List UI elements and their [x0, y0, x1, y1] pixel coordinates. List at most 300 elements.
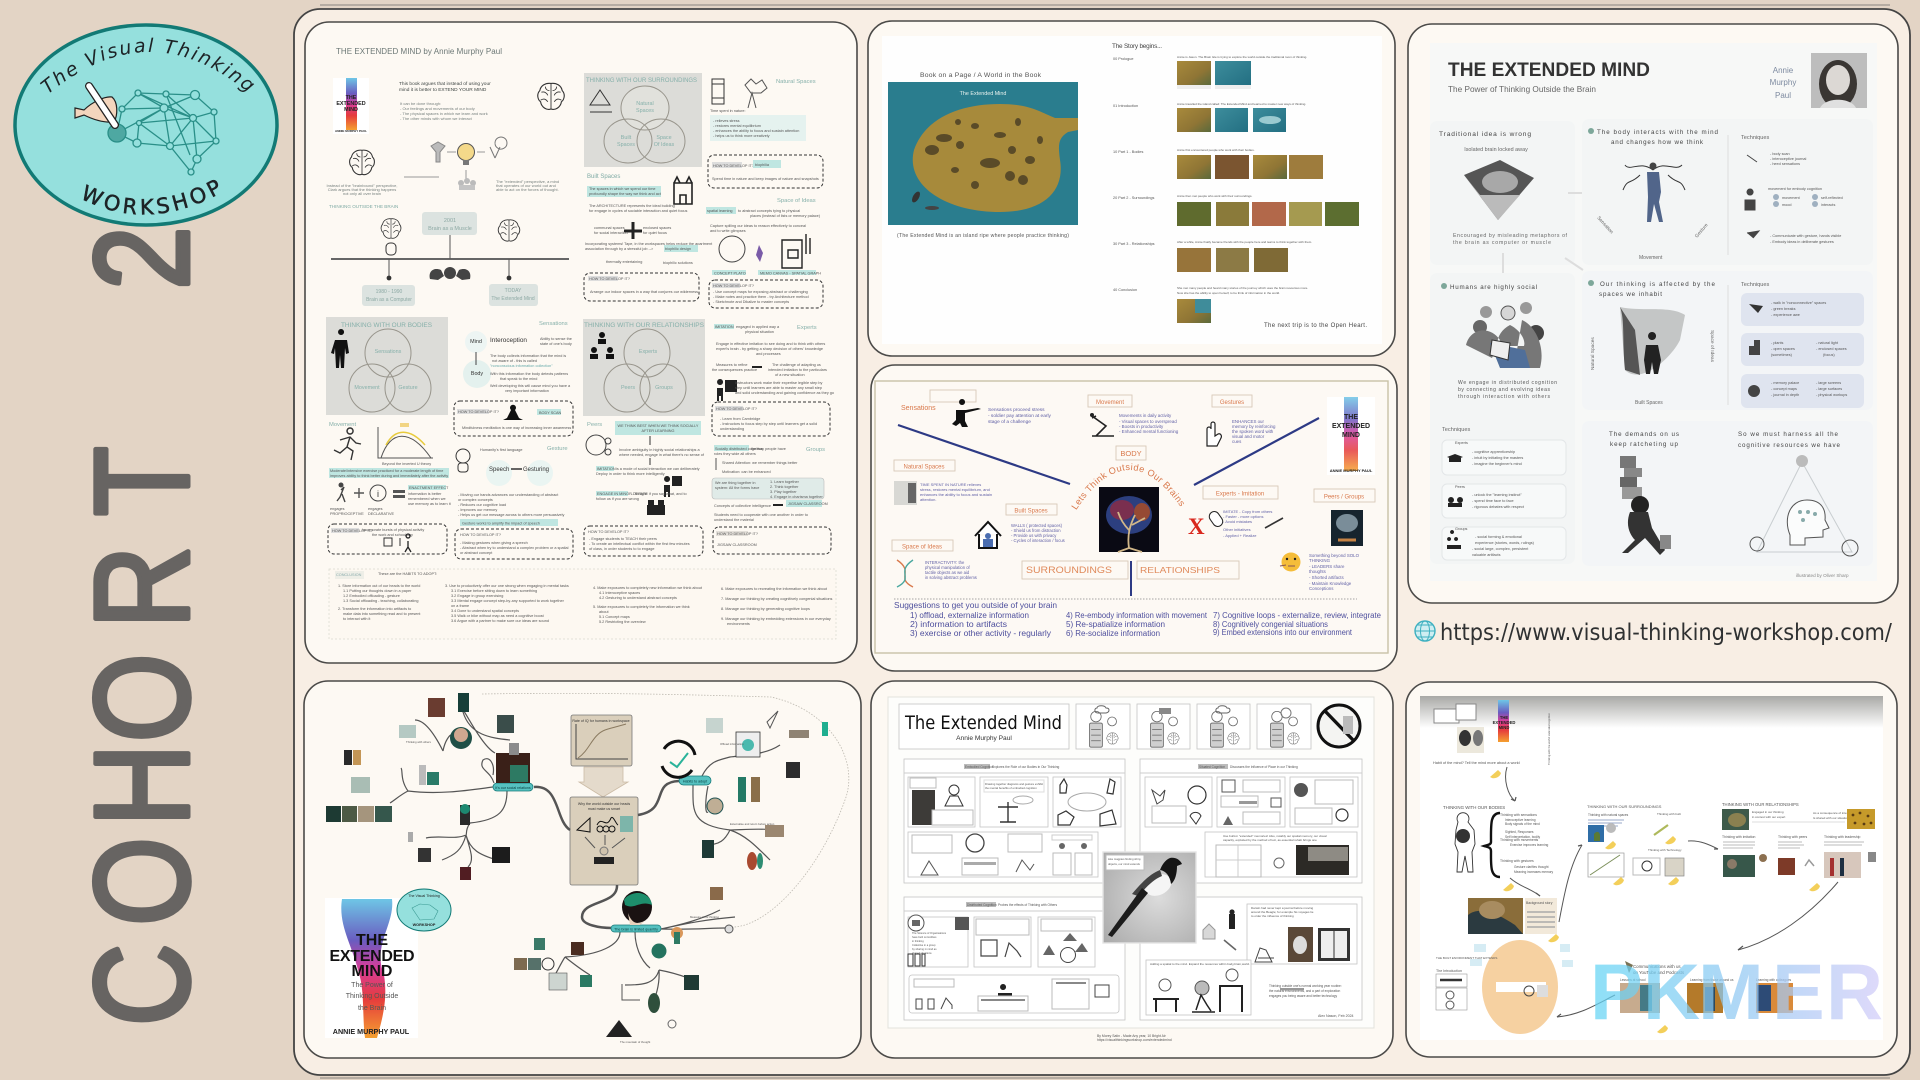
section: thinking with others bottom: Learning from those around us [1690, 978, 1734, 982]
dashed box: how to Surroundings [584, 273, 699, 301]
movement explanatory notes [329, 468, 452, 516]
peers groups item: - LEADERS share [1309, 564, 1345, 569]
card: body interacts: - Communicate with gesture, hands visible [1770, 234, 1841, 238]
card: humans social [1430, 273, 1575, 564]
experts item: X [1188, 514, 1205, 539]
built spaces notes: for social interaction [594, 231, 628, 235]
dashed box: how to natural spaces: HOW TO DEVELOP IT? [713, 164, 754, 168]
built spaces notes: Incorporating systems! Tape, in the workspaces helps reduce the apartment [585, 242, 713, 246]
gestures item [1207, 395, 1276, 446]
mind map thumbnails [326, 693, 828, 1037]
technique: ideas: - physical workups [1816, 393, 1847, 397]
card: spaces: Our thinking is affected by the [1600, 281, 1716, 288]
experts item: - Applied + Realize [1223, 533, 1257, 538]
movement explanatory notes: i [377, 489, 379, 499]
conclusion box: 3.1 Exercise before sitting down to learn something [451, 589, 537, 593]
extended perspective text: able to act on the forces of thought. [496, 187, 559, 192]
book cover large [325, 898, 418, 1038]
venn panel: relationships: Experts [639, 349, 657, 355]
section: distributed cognition: shared situations [912, 951, 932, 955]
venn panel: bodies: Movement [354, 385, 380, 391]
dashed box: gesture how [455, 529, 573, 559]
movement item: - Boosts in productivity [1119, 424, 1164, 429]
conclusion box: to interact with it [343, 617, 371, 621]
dotted separator [894, 598, 1357, 600]
story row: introduction: Annie travelled the island called: The Extended Mind and learned to master new ways of thinking. [1177, 102, 1306, 106]
author name: Paul [1775, 91, 1791, 100]
pill nodes [493, 776, 711, 932]
author photo [1811, 53, 1867, 108]
conclusion box: 4. Make exposures to completely new information we think about [593, 586, 703, 590]
timeline box: 2001 [422, 212, 477, 235]
section: thinking with others bottom [1620, 961, 1793, 1013]
conclusion box: 8. Manage our thinking by generating cognitive loops [721, 607, 810, 611]
dashed box: experts how: - Instructors to focus step by step until learners get a solid [720, 422, 817, 426]
natural spaces item: enhances the ability to focus and sustain [920, 492, 992, 497]
dashed box: gesture how: - Making gestures when giving a speech [460, 541, 528, 545]
gesture notes: - Reduces our cognitive load [458, 503, 506, 507]
mini book cover: EXTENDED [1332, 423, 1370, 430]
story row: part 3: 30 Part 3 - Relationships [1113, 242, 1155, 246]
technique: ideas: - large screens [1816, 381, 1841, 385]
section: bodies: THINKING WITH OUR BODIES [1443, 805, 1505, 810]
venn panel: relationships [583, 319, 705, 416]
card: body interacts: - Embody ideas in deliberate gestures [1770, 240, 1834, 244]
story row: part 1: 10 Part 1 - Bodies [1113, 150, 1143, 154]
gesture notes: Gesture works to amplify the impact of speech [462, 522, 540, 526]
surroundings label [1022, 561, 1128, 579]
section: bodies: Sighted, Responses [1505, 830, 1534, 834]
built spaces item [975, 504, 1065, 548]
groups notes: 3. Play together [770, 490, 797, 494]
small mind map labels: The mountain of thought [620, 1040, 651, 1044]
timeline box: today: The Extended Mind [491, 296, 535, 302]
groups notes: roles they wide all others [714, 452, 756, 456]
illustration: loaded figure [1620, 456, 1671, 555]
icon: cycle check [662, 741, 695, 777]
sensations item: - soldier pay attention at early [988, 413, 1052, 419]
central brain image [1099, 487, 1159, 552]
movement item: - Enhanced mental functioning [1119, 429, 1179, 434]
section: situated cognition: Use built-in "extended" memories! Also, notably our spatial memory, our visual [1223, 834, 1327, 838]
card: demands and resources [1582, 421, 1873, 566]
card: demands and resources: So we must harness all the [1738, 431, 1839, 438]
book cover thumbnail: ANNIE MURPHY PAUL [335, 129, 367, 133]
conclusion box: 7. Manage our thinking by creating cognitively congenial situations [721, 597, 833, 601]
small mind map labels: Externalise and return before action [730, 822, 775, 826]
technique: ideas [1741, 374, 1864, 408]
dashed box: peers how: HOW TO DEVELOP IT? [588, 530, 629, 534]
section: conclusion face: THE BUILT ENVIRONMENT THAT EXTENDS [1436, 956, 1497, 960]
book cover thumbnail: MIND [344, 107, 358, 113]
section: bodies: Self interpretation, bodily [1505, 835, 1540, 839]
section: thinking with others bottom: Communications with us [1633, 964, 1681, 969]
section: distributed cognition: Distributed Cognition [967, 903, 997, 907]
built spaces notes: biophilic design [665, 247, 691, 251]
section: surroundings: THINKING WITH OUR SURROUNDINGS [1587, 804, 1662, 809]
story row: part 3: After a while, Annie finally became friends with the people here and learns to think together with them. [1177, 240, 1312, 244]
dashed box: gesture how: or abstract concept [460, 551, 493, 555]
suggestions: 4) Re-embody information with movement [1066, 611, 1208, 620]
intro text: - The other minds with whom we interact [400, 116, 473, 121]
card: traditional idea [1430, 121, 1590, 274]
sheet title box: Annie Murphy Paul [956, 735, 1012, 742]
groups notes: the way people have [751, 447, 786, 451]
card: body interacts: - body scan [1770, 152, 1790, 156]
movement explanatory notes: PROPRIOCEPTIVE [330, 512, 364, 516]
groups notes: understand the material [714, 518, 754, 522]
card: spaces: Space of Ideas [1709, 330, 1715, 363]
card: body interacts: movement [1782, 196, 1801, 200]
magpie image: Like magpies finding shiny [1108, 857, 1141, 861]
card: humans social: by connecting and evolving ideas [1458, 387, 1550, 393]
gestures item: memory by reinforcing [1232, 424, 1276, 429]
pill nodes: Habits to adopt [683, 780, 707, 784]
dashed box: peers how [584, 526, 703, 556]
natural spaces item: stress, restores mental equilibrium, and [920, 487, 990, 492]
conclusion box: 3. Use to productively offer our one strong when engaging in mental tasks [445, 584, 569, 588]
gesture notes: or complex concepts [458, 498, 493, 502]
dashed box: how to ideas: - Make notes and practice them - try Architecture method [713, 295, 809, 299]
story row: introduction: 01 Introduction [1113, 104, 1138, 108]
experts notes: physical situation [745, 330, 774, 334]
small workshop badge [397, 889, 451, 931]
sensations notes: "nonconscious information collection" [490, 364, 553, 368]
built spaces item: Built Spaces [1014, 508, 1048, 514]
section: bodies: Meaning increases memory [1514, 870, 1554, 874]
dashed box: how to natural spaces [708, 155, 823, 188]
experts item: IMITATE - Copy from others [1223, 509, 1272, 514]
technique: peers: - rigorous debates with respect [1472, 505, 1525, 509]
story heading: The Story begins... [1112, 43, 1162, 50]
suggestions: 5) Re-spatialize information [1066, 620, 1165, 629]
space of ideas item: tactile objects as we aid [925, 570, 970, 575]
gesture notes: - Moving our hands advances our understanding of abstract [458, 493, 559, 497]
canvas intro: MIND [1499, 725, 1509, 730]
timeline [331, 212, 569, 306]
book cover large: The Power of [351, 982, 393, 989]
dashed box: experts how: HOW TO DEVELOP IT? [716, 407, 757, 411]
section: bodies: Thinking with sensations [1500, 813, 1537, 817]
story row: prologue: Annie is Jason. The Brain Isle is trying to explore the world outside the traditional room of thinking. [1177, 55, 1307, 59]
small workshop badge: The Visual Thinking [408, 894, 440, 898]
venn panel: relationships: THINKING WITH OUR RELATIONSHIPS [584, 323, 704, 329]
conclusion box: 1.2 Embodied offloading - gesture [343, 594, 400, 598]
built spaces notes: thermally entertaining [606, 260, 642, 264]
built spaces notes: profoundly shape the way we think and act [589, 192, 662, 196]
conclusion box: on a frame [451, 604, 469, 608]
sensations notes: very important information [505, 389, 549, 393]
venn panel: surroundings: Built [621, 135, 632, 141]
natural spaces item: attention. [920, 497, 936, 502]
suggestions: 9) Embed extensions into our environment [1213, 628, 1353, 637]
suggestions: 3) exercise or other activity - regularly [910, 629, 1051, 638]
card: humans social: Techniques [1442, 427, 1471, 433]
intro text [399, 81, 491, 121]
section: spatial notes right: Adding a spatial to the mind. Expand the resources within body,brain,world. [1150, 962, 1250, 966]
section: bodies: Body signals of the mind [1505, 822, 1540, 826]
conclusion box: make data into something read and to present [343, 612, 421, 616]
technique: peers: Peers [1455, 485, 1465, 489]
sensations notes: With this information the body detects patterns [490, 372, 568, 376]
conclusion box: 4.2 Gesturing to understand abstract concepts [599, 596, 677, 600]
space of ideas item [892, 540, 977, 587]
technique: groups: - social large, complex, persistent [1472, 547, 1529, 551]
experts notes: intended imitation to the particulars [768, 368, 827, 372]
venn panel: surroundings: Of Ideas [654, 142, 674, 148]
section: spatial notes right: engages you being aware and better technology [1269, 994, 1337, 998]
groups notes: 2. Think together [770, 485, 799, 489]
author name [1770, 66, 1796, 100]
story row: conclusion [1113, 286, 1308, 323]
natural spaces column [710, 79, 816, 141]
peers notes [586, 421, 705, 515]
space of ideas column [706, 198, 821, 276]
card: demands and resources: keep ratcheting up [1610, 441, 1679, 448]
sensations notes: Mind [470, 339, 482, 345]
section: thinking with others bottom: on YouTube and Podcasts [1633, 970, 1685, 975]
logo text top: The Visual Thinking [40, 38, 254, 92]
sensations notes: Body [471, 371, 483, 377]
section: spatial notes right: Darwin had never kept a journal before moving [1251, 906, 1314, 910]
natural spaces column: - restores mental equilibrium [713, 124, 761, 128]
small workshop badge: WORKSHOP [413, 923, 436, 927]
groups notes: We are thing together in [715, 481, 755, 485]
venn panel: surroundings: Spaces [636, 108, 654, 114]
technique: experts: - intuit by initiating the masters [1472, 456, 1523, 460]
chart card [571, 715, 632, 766]
arc title: Lets Think Outside Our Brains [1071, 463, 1184, 510]
groups notes: JIGSAW CLASSROOM [788, 502, 828, 506]
conclusion box: 9. Manage our thinking by embedding extensions in our everyday [721, 617, 831, 621]
natural spaces item: TIME SPENT IN NATURE relieves [920, 482, 981, 487]
technique: natural: - green breaks [1771, 307, 1796, 311]
groups notes [712, 445, 828, 522]
technique: peers: - unlock the "learning instinct" [1472, 493, 1522, 497]
section: situated cognition: capacity, exploited by the method of loci, as essential rehab brings one [1223, 838, 1317, 842]
experts notes: Experts [797, 325, 817, 331]
space of ideas column: places (instead of lists or memory palace) [750, 214, 821, 218]
conclusion box: 1.1 Putting our thoughts down in a paper [343, 589, 412, 593]
story row: conclusion: Now she has the ability to open herself, to be think of information in the world. [1177, 291, 1280, 295]
section: relationships: Is shared with our situation [1813, 816, 1849, 820]
dashed box: experts how [712, 402, 830, 436]
book cover thumbnail: EXTENDED [336, 101, 366, 107]
section: distributed cognition: have built on Hobbes [912, 935, 937, 939]
movement explanatory notes: ENACTMENT EFFECT [409, 486, 449, 490]
sketch notes title: THE EXTENDED MIND by Annie Murphy Paul [336, 47, 502, 56]
dashed box: how to ideas: - Sketchnote and Dikalize to master concepts [713, 300, 789, 304]
venn panel: relationships: Peers [621, 385, 635, 391]
venn panel: bodies: THINKING WITH OUR BODIES [341, 323, 432, 329]
section: relationships: As a consequence of interacting [1813, 811, 1856, 815]
extended cognition diagram [404, 137, 507, 190]
gesture notes: Gesturing [523, 467, 549, 473]
built spaces item: - Shield us from distraction [1011, 528, 1061, 533]
suggestions: 2) information to artifacts [910, 620, 1007, 629]
painting of hand [1468, 898, 1557, 934]
gesture notes: - Helps us get our message across to others more persuasively [458, 513, 564, 517]
magpie image: objects, our mind extends [1108, 862, 1140, 866]
venn panel: bodies: Gesture [398, 385, 418, 391]
dashed box: how to ideas [709, 280, 823, 308]
technique: natural [1741, 293, 1864, 326]
movement explanatory notes: engages [368, 507, 383, 511]
card: traditional idea: Isolated brain locked away [1464, 147, 1528, 153]
built spaces notes: The spaces in which we spend our time [589, 187, 655, 191]
story row: part 1 [1113, 148, 1323, 179]
space of ideas item: INTERACTIVITY: the [925, 560, 965, 565]
conclusion box: about [599, 610, 609, 614]
dashed box: how to natural spaces: biophilia [755, 163, 770, 167]
canvas intro [1433, 700, 1551, 765]
conclusion box: 5. Make exposures to completely the information we think [593, 605, 690, 609]
dashed box: groups how: JIGSAW CLASSROOM [717, 543, 757, 547]
card: body interacts: self-reflected [1821, 196, 1843, 200]
space of ideas column: Space of Ideas [777, 198, 816, 204]
peers notes: Peers [587, 422, 602, 428]
card: demands and resources: The demands on us [1609, 431, 1679, 438]
venn panel: surroundings: THINKING WITH OUR SURROUNDINGS [586, 78, 697, 84]
built spaces notes: enclosed spaces [643, 226, 671, 230]
natural spaces item: Natural Spaces [903, 464, 945, 470]
sensations item [901, 390, 1052, 427]
experts item [1188, 486, 1283, 539]
movement explanatory notes: improves ability to think better during and immediately after the activity [330, 474, 448, 478]
movement explanatory notes: use memory as to learn it [408, 502, 452, 506]
peers notes: ENGAGE IN MINOR DEBATE [597, 492, 648, 496]
experts notes: step until learners are able to master any small step [735, 386, 822, 390]
small mind map labels [406, 740, 775, 1044]
timeline box: today [489, 284, 538, 306]
dashed box: body scan: Mindfulness meditation is one way of increasing inner awareness [462, 426, 571, 430]
movement item [1088, 395, 1179, 436]
dashed box: groups how: HOW TO DEVELOP IT? [717, 532, 758, 536]
section: situated cognition: Situated Cognition [1199, 765, 1225, 769]
chart: exercise and cognition curve [378, 423, 433, 466]
card: body interacts: - heed sensations [1770, 162, 1800, 166]
extended perspective text: that operates of our world out and [496, 183, 556, 188]
chart: exercise and cognition curve: Beyond the inverted U theory [382, 462, 431, 466]
peers notes: Deploy in order to think more intelligently [596, 472, 665, 476]
space of ideas column: and to write glimpses [710, 229, 746, 233]
section: distributed cognition: Probes the effects of Thinking with Others [998, 903, 1057, 907]
venn panel: bodies: Sensations [375, 349, 402, 355]
section: distributed cognition: The Science of Organisations [912, 931, 947, 935]
space of ideas column: CONCEPT PLATO [714, 272, 746, 276]
experts notes: Engage in effective imitation to see doing and to think with others [716, 342, 825, 346]
card: humans social: We engage in distributed cognition [1458, 380, 1557, 386]
section: surroundings: Thinking with built [1657, 812, 1681, 816]
book cover large: Thinking Outside [346, 993, 398, 1000]
timeline box: 2001: 2001 [444, 218, 456, 224]
traditional perspective text: Clark argues that the thinking happens [328, 187, 396, 192]
summary title: THE EXTENDED MIND [1448, 60, 1650, 81]
technique: peers: - spend time face to face [1472, 499, 1514, 503]
section: thinking with others bottom: Learning with colleagues [1756, 978, 1791, 982]
body label: BODY [1120, 449, 1142, 458]
technique: built: - natural light [1816, 341, 1839, 345]
card: demands and resources: cognitive resources we have [1738, 442, 1841, 449]
dashed box: movement how: the work and school day [372, 533, 413, 537]
gesture notes: Gesture [547, 446, 568, 452]
section: distributed cognition: in thinking [912, 939, 924, 943]
gesture notes [456, 446, 568, 526]
magpie image [1103, 852, 1196, 943]
experts notes: Instructors work make their expertise legible step by [735, 381, 822, 385]
peers notes: is a mode of social interaction we can deliberately [616, 467, 700, 471]
dashed box: how to ideas: - Use concept maps for exposing abstract or challenging [713, 290, 808, 294]
card: spaces: Built Spaces [1635, 400, 1663, 406]
dashed box: body scan [454, 401, 573, 436]
space of ideas column: MEMO CANVAS - SPATIAL GRAPH [760, 272, 821, 276]
card: body interacts: mood [1782, 203, 1792, 207]
story row: part 2 [1113, 194, 1359, 226]
panel 6: the extended mind sketch sheet [871, 681, 1393, 1058]
dashed box: how to natural spaces: Spend time in nature and keep images of nature and snapshots [712, 177, 819, 181]
natural spaces column: - relieves stress [713, 119, 740, 123]
built spaces notes: for engage in cycles of sociable interaction and quiet focus [589, 209, 687, 213]
card: body interacts: Gesture [1694, 222, 1710, 239]
thinking outside the brain heading: THINKING OUTSIDE THE BRAIN [329, 204, 398, 209]
dashed box: groups how [713, 527, 831, 554]
intro text: - Our feelings and movements of our body [400, 106, 475, 111]
sensations notes: that speak to the mind [500, 377, 537, 381]
sensations notes: not aware of - this is called [492, 359, 537, 363]
mini book cover: THE [1344, 414, 1358, 421]
traditional perspective text [327, 183, 397, 196]
conclusion box: 2. Transform the information into artifacts to [338, 607, 411, 611]
built spaces notes: for quiet focus [643, 231, 667, 235]
relationships label [1137, 561, 1239, 579]
dashed box: peers how: - To create an intellectual conflict within the first few minutes [589, 542, 690, 546]
top gradient shadow [1420, 696, 1883, 728]
groups notes: Shared Attention: we remember things better [722, 461, 798, 465]
mini book cover [1327, 397, 1375, 475]
experts item: Experts - Imitation [1216, 492, 1264, 498]
natural spaces column: Time spent in nature: [710, 109, 746, 113]
story row: prologue [1113, 55, 1307, 89]
peers groups item: - Shorted artifacts [1309, 575, 1344, 580]
sheet credit [1097, 1034, 1172, 1042]
central card [570, 797, 638, 885]
story row: part 1: Annie first encountered people who work with their bodies. [1177, 148, 1255, 152]
section: situated cognition [1140, 759, 1362, 883]
book cover large: ANNIE MURPHY PAUL [333, 1027, 410, 1036]
icon: muscle brain [430, 267, 470, 280]
built spaces notes: Built Spaces [587, 174, 620, 180]
peers notes: AFTER LEARNING [642, 429, 674, 433]
traditional perspective text: not only all over brain [343, 191, 381, 196]
movement explanatory notes: DECLARATIVE [368, 512, 395, 516]
groups notes: system: All the forms have [715, 486, 759, 490]
map of the island: The Extended Mind [960, 91, 1006, 97]
section: bodies [1443, 805, 1554, 877]
story row: part 2: Annie then met people who work with their surroundings. [1177, 194, 1253, 198]
author name: Annie [1773, 66, 1794, 75]
credit: illustrated by Oliver Sharp [1796, 573, 1849, 578]
section: surroundings: Thinking with natural spaces [1588, 813, 1629, 817]
mind map connectors [390, 710, 780, 1002]
conclusion box: 5.1 Concept maps [599, 615, 630, 619]
book cover large: THE [356, 932, 388, 949]
technique: ideas: - journal in depth [1771, 393, 1799, 397]
experts notes: The challenge of adapting us [772, 363, 821, 367]
technique: groups [1442, 527, 1566, 560]
story row: part 2: 20 Part 2 - Surroundings [1113, 196, 1154, 200]
technique: groups: experience (stories, words, rulings) [1475, 541, 1535, 545]
conclusion box: These are the HABITS TO ADOPT: [378, 572, 437, 576]
